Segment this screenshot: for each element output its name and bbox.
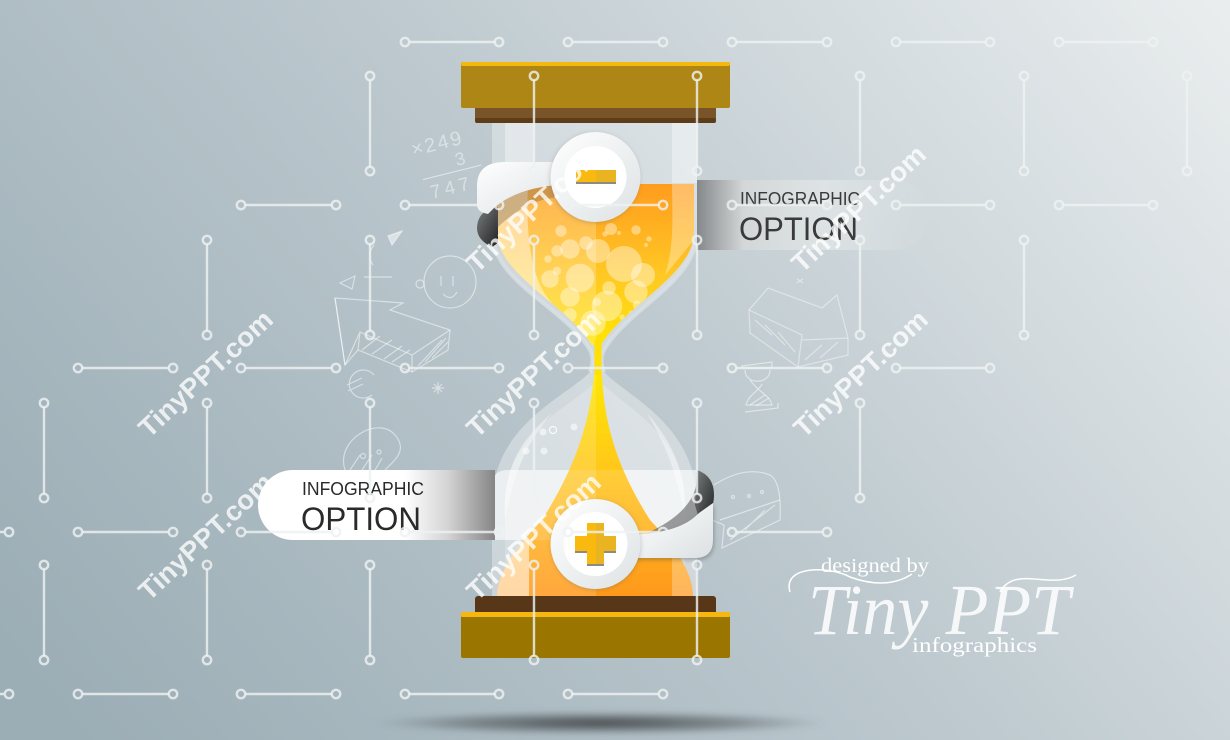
doodle: dashed arrows — [340, 231, 402, 289]
pill — [258, 470, 495, 540]
callout: bottom option — [258, 470, 714, 590]
doodle: multiplication — [409, 124, 488, 206]
glass: lower bulb — [492, 372, 697, 597]
base top — [475, 596, 716, 616]
ribbon back — [477, 207, 498, 247]
glass: upper highlights — [505, 123, 697, 183]
cap underside — [475, 105, 716, 123]
small decorations in glass — [522, 424, 578, 454]
watermarks: TinyPPT.com — [461, 467, 607, 606]
doodle: multiplication: 3 — [453, 148, 467, 170]
glass: lower inner bulb — [505, 385, 685, 597]
watermarks: TinyPPT.com — [788, 304, 934, 443]
hourglass — [461, 62, 730, 658]
infographics: infographics — [912, 633, 1037, 657]
doodle: euro and star — [347, 370, 444, 398]
watermarks: TinyPPT.com — [133, 304, 279, 443]
doodle: multiplication: ×249 — [409, 127, 466, 161]
ribbon shadow — [495, 183, 570, 228]
glass: upper bulb — [492, 123, 697, 372]
upper sand — [497, 184, 694, 349]
pill — [697, 180, 930, 250]
glass: lower highlight — [505, 413, 685, 520]
ribbon front — [635, 503, 713, 558]
bottom cap — [461, 596, 730, 658]
watermarks: TinyPPT.com — [461, 304, 607, 443]
watermarks: TinyPPT.com — [133, 467, 279, 606]
translucent band — [492, 470, 697, 540]
callout: top option — [477, 132, 930, 250]
brand logo — [789, 555, 1076, 657]
ribbon back — [695, 470, 714, 522]
cap block — [461, 62, 730, 108]
falling sand stream — [594, 340, 602, 390]
label: INFOGRAPHIC — [740, 188, 860, 209]
label: INFOGRAPHIC — [302, 478, 424, 499]
sketch doodles — [335, 124, 848, 548]
doodle: multiplication: 747 — [428, 173, 476, 204]
doodle: small hourglass — [742, 362, 778, 412]
watermarks — [133, 139, 934, 606]
ground shadow — [372, 711, 828, 735]
glass: rim around upper sand — [492, 232, 697, 372]
sand shading — [497, 184, 596, 349]
top cap — [461, 62, 730, 123]
watermarks: TinyPPT.com — [786, 139, 932, 278]
label big: OPTION — [739, 211, 858, 247]
script swash — [789, 570, 1076, 592]
base block — [461, 612, 730, 658]
doodle: left speech bubble — [344, 428, 400, 470]
doodle: right 3D arrow — [749, 279, 848, 367]
designed by: designed by — [821, 555, 929, 577]
doodle: smiley — [416, 256, 476, 308]
bubbles — [541, 223, 655, 336]
script name: Tiny PPT — [808, 570, 1075, 650]
label big: OPTION — [301, 501, 421, 537]
watermarks: TinyPPT.com — [461, 139, 607, 278]
doodle: left 3D arrow — [335, 298, 450, 372]
doodle: right speech bubble — [712, 472, 780, 548]
ribbon shadow — [645, 472, 699, 534]
plus button — [550, 499, 641, 590]
minus button — [550, 132, 640, 223]
lower sand — [497, 375, 694, 597]
ribbon front — [477, 162, 570, 214]
